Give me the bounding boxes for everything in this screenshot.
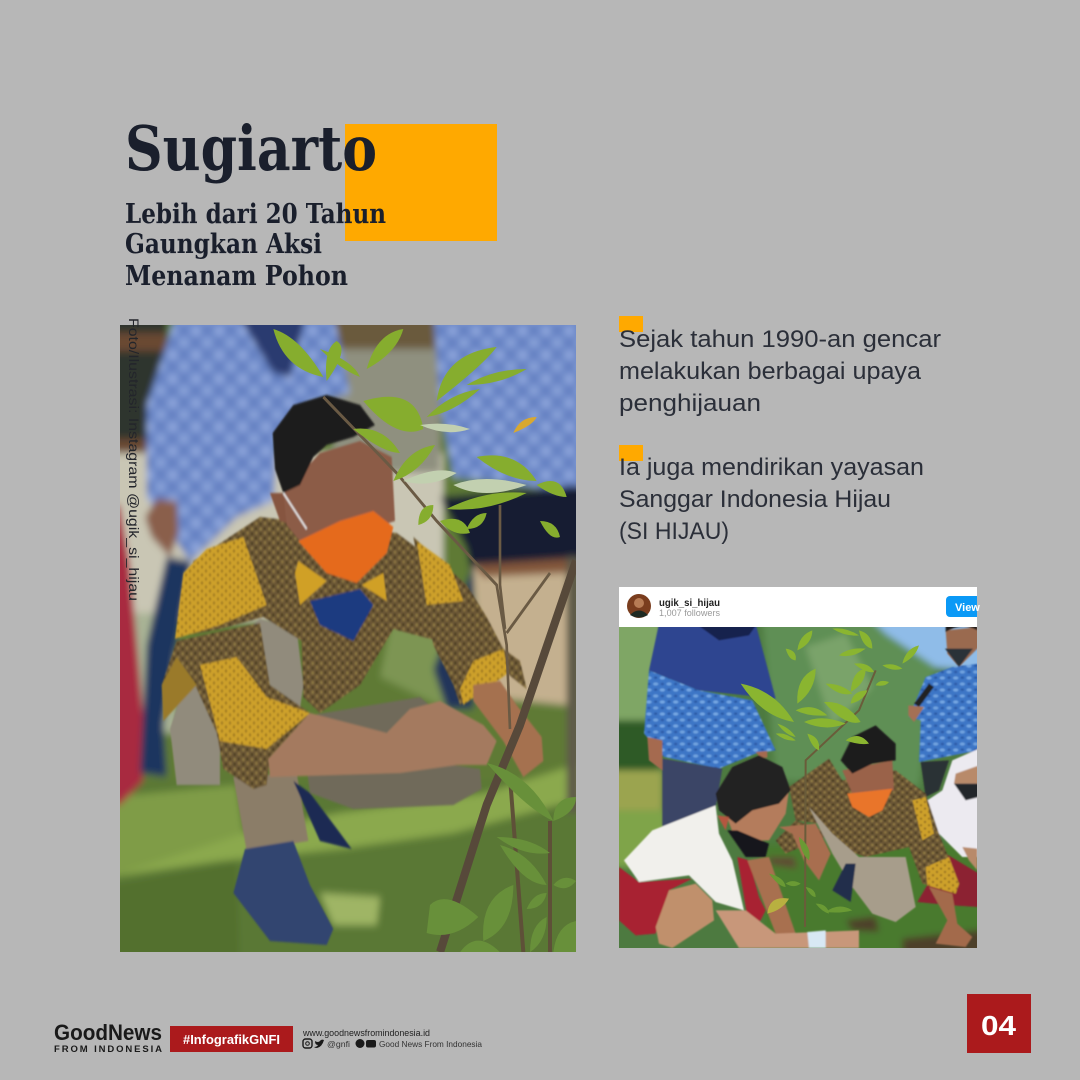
navy skirt [140, 557, 192, 777]
sapling [741, 628, 919, 927]
collar [295, 561, 387, 605]
gnfi handle: @gnfi [327, 1039, 350, 1049]
leaves [741, 628, 919, 750]
ear [270, 493, 293, 525]
text block: since the 1990s: Sejak tahun 1990-an gencar [619, 326, 941, 353]
photo background [110, 313, 587, 973]
hashtag badge: #InfografikGNFI [183, 1033, 280, 1047]
upper sleeve [175, 537, 267, 639]
hashtag badge [170, 1026, 293, 1052]
footer logo [54, 1020, 162, 1055]
people [619, 624, 979, 948]
footer logo: FROM INDONESIA [54, 1044, 162, 1055]
avatar [627, 594, 651, 618]
second photo: planting with children [619, 627, 977, 948]
subtitle [125, 199, 386, 292]
navy sock [293, 781, 352, 849]
boy [619, 755, 859, 948]
woman in blue [644, 624, 776, 830]
text block: foundation: Ia juga mendirikan yayasan [619, 454, 924, 481]
lower leaves [769, 837, 852, 914]
trees, sky and grass [619, 627, 977, 948]
hijab child [917, 749, 979, 907]
username: ugik_si_hijau [659, 597, 720, 609]
text block: since the 1990s: melakukan berbagai upaya [619, 358, 921, 385]
text block: foundation: (SI HIJAU) [619, 518, 729, 545]
sapling [273, 329, 576, 952]
subtitle: Gaungkan Aksi [125, 229, 322, 260]
text block: since the 1990s [619, 316, 941, 417]
card header [619, 587, 977, 627]
right sleeve [413, 537, 527, 705]
footer contacts [302, 1028, 482, 1049]
arm [268, 701, 497, 777]
leaves upper [273, 329, 567, 538]
yellow leaf [513, 417, 537, 433]
page number: 04 [981, 1010, 1016, 1041]
footer logo: GoodNews [54, 1020, 162, 1045]
page number [967, 994, 1031, 1053]
blue undershirt [310, 589, 373, 641]
man [162, 395, 543, 945]
pot [473, 559, 567, 705]
instagram card [609, 587, 996, 960]
text block: foundation [619, 445, 924, 545]
red strip [120, 502, 149, 808]
text block: foundation: Sanggar Indonesia Hijau [619, 486, 891, 513]
yellow leaf [767, 898, 789, 914]
hair [273, 395, 375, 493]
view button: View [955, 602, 980, 614]
leaves pale [403, 424, 527, 493]
main photo: man planting a tree [110, 313, 587, 973]
trousers [170, 619, 320, 785]
forearm sleeve [162, 623, 310, 789]
man in blue [908, 624, 979, 797]
social icons [303, 1039, 376, 1048]
page name: Good News From Indonesia [379, 1039, 482, 1049]
blue figures [147, 313, 350, 561]
marker 1 [619, 316, 643, 332]
orange mask [298, 511, 393, 583]
shirt torso [192, 516, 433, 713]
view button [946, 596, 980, 617]
text block: since the 1990s: penghijauan [619, 390, 761, 417]
hand behind [145, 499, 178, 557]
grass [110, 781, 587, 973]
leaves lower [427, 763, 576, 952]
followers: 1,007 followers [659, 608, 720, 619]
marker 2 [619, 445, 643, 461]
photo credit: Foto/Ilustrasi: Instagram @ugik_si_hijau [126, 318, 141, 601]
accent square [345, 124, 497, 241]
title: Sugiarto [125, 112, 377, 185]
batik man [776, 725, 972, 947]
subtitle: Menanam Pohon [125, 261, 348, 292]
footer contacts: www.goodnewsfromindonesia.id [302, 1028, 430, 1038]
subtitle: Lebih dari 20 Tahun [125, 199, 386, 230]
mask strap [283, 493, 307, 529]
face and neck [283, 441, 395, 549]
shoe [233, 841, 333, 945]
